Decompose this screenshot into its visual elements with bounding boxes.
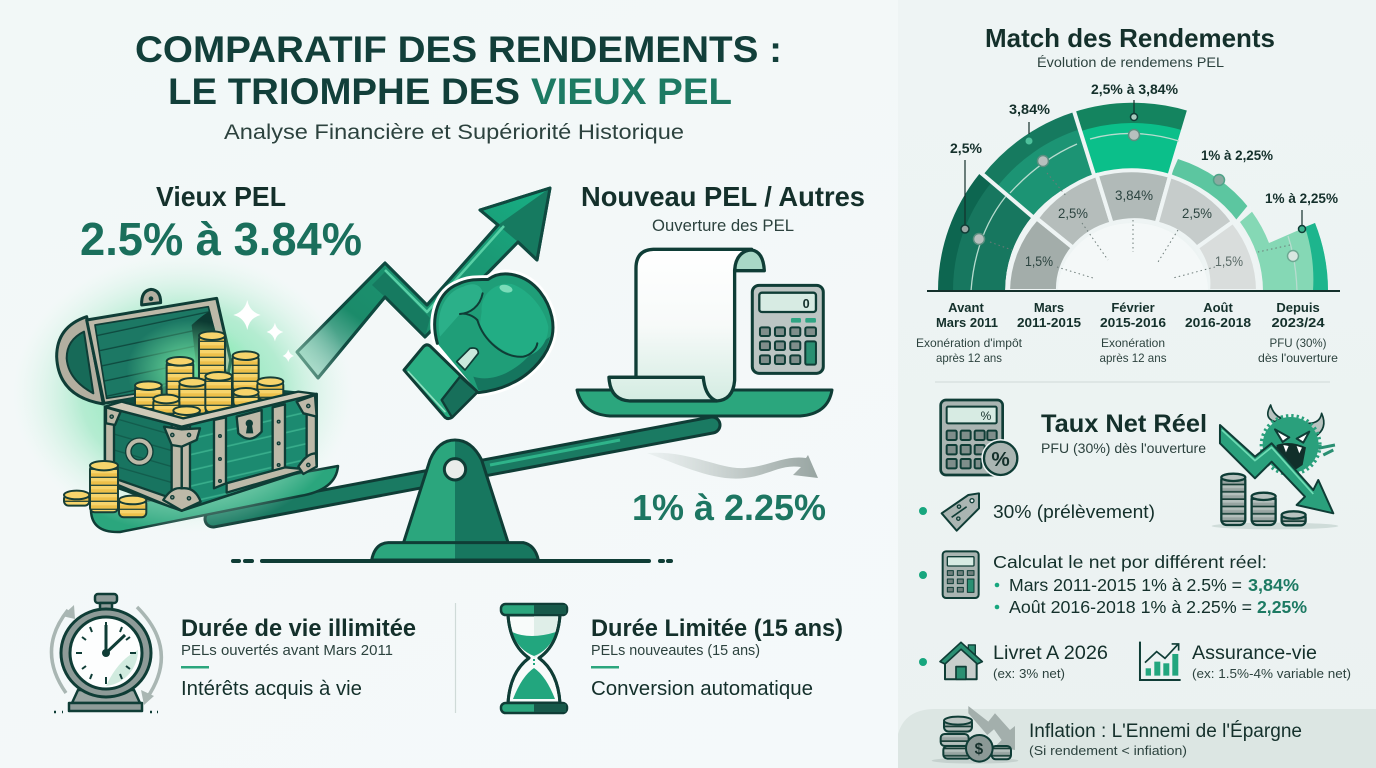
title: COMPARATIF DES RENDEMENTS : — [135, 28, 782, 70]
title — [135, 28, 782, 112]
icon: boxing glove — [404, 274, 553, 419]
bullet item: calcul du net: Calculat le net por différent réel: — [993, 552, 1267, 572]
axis labels — [936, 300, 1325, 330]
axis labels: Août — [1203, 300, 1233, 315]
base line — [262, 559, 649, 563]
sparkles — [233, 300, 294, 362]
icon: calculator with zero: 0 — [803, 297, 810, 311]
icon: price tag — [942, 493, 979, 531]
arrow: rising trend — [297, 188, 550, 378]
text: PFU: PFU (30%) dès l'ouverture — [1041, 440, 1206, 456]
icon: calculator with zero — [752, 285, 823, 373]
axis labels: Mars — [1034, 300, 1064, 315]
axis — [927, 290, 1340, 292]
item: assurance-vie: Assurance-vie — [1192, 643, 1317, 664]
value labels: outer: 1% à 2,25% — [1265, 190, 1339, 206]
bullet item: calcul du net: 3,84% — [1248, 575, 1299, 595]
panel: right column background — [898, 0, 1376, 768]
icon: beam — [213, 425, 712, 519]
lid — [57, 289, 231, 404]
icon: rising bar chart — [1140, 642, 1181, 680]
value labels: inner: 2,5% — [1182, 206, 1212, 221]
icon: hourglass — [501, 604, 567, 713]
value labels: outer: 1% à 2,25% — [1201, 147, 1274, 163]
axis labels: 2015-2016 — [1100, 315, 1166, 330]
icon: calculator — [943, 551, 979, 598]
chest glow — [13, 253, 353, 533]
text block: durée illimitée: Intérêts acquis à vie — [181, 678, 362, 700]
illustration: balance scale — [91, 390, 832, 561]
axis labels: Avant — [948, 300, 984, 315]
bullet item: calcul du net: Août 2016-2018 1% à 2.25% = — [1009, 597, 1252, 617]
outer segments — [938, 103, 1328, 291]
icon: right pan — [577, 390, 832, 416]
markers — [961, 114, 1306, 262]
axis labels: 2023/24 — [1272, 315, 1325, 330]
axis notes — [916, 336, 1338, 365]
panel: inflation band: (Si rendement < infiation) — [1029, 743, 1187, 758]
value labels: inner: 1,5% — [1025, 254, 1053, 269]
heading: nouveau PEL: Nouveau PEL / Autres — [581, 181, 865, 212]
text block: durée limitée: Conversion automatique — [591, 678, 813, 700]
heading: taux net réel: Taux Net Réel — [1041, 410, 1207, 438]
icon: left pan — [91, 466, 338, 532]
icon: document scroll — [609, 249, 764, 401]
value labels: inner: 2,5% — [1058, 206, 1088, 221]
bullet item: prélèvement: 30% (prélèvement) — [993, 502, 1155, 522]
axis labels: Depuis — [1276, 300, 1320, 315]
text: ouverture des PEL: Ouverture des PEL — [652, 216, 794, 235]
value labels: inner: 1,5% — [1215, 254, 1243, 269]
value labels: outer: 2,5% — [950, 140, 983, 156]
axis notes: après 12 ans — [1100, 351, 1166, 365]
icon: fulcrum — [372, 440, 538, 560]
bullet item: livret A: Livret A 2026 — [993, 643, 1108, 664]
icon: stopwatch clock — [51, 594, 161, 712]
inner gray ring — [1008, 170, 1258, 291]
axis labels: 2011-2015 — [1017, 315, 1081, 330]
value labels: outer — [950, 81, 1339, 206]
bullet item: calcul du net: 2,25% — [1257, 597, 1307, 617]
coin stacks outside chest — [64, 461, 146, 517]
icon: calculator percent: % — [981, 409, 992, 423]
item: assurance-vie — [1140, 642, 1351, 681]
title: VIEUX PEL — [531, 70, 732, 112]
chart: semicircular yield timeline — [916, 81, 1340, 365]
text: évolution: Évolution de rendemens PEL — [1037, 54, 1224, 70]
icon: monster with falling arrow and coins — [1212, 405, 1338, 529]
text block: durée limitée — [591, 615, 843, 700]
text block: durée limitée: Durée Limitée (15 ans) — [591, 615, 843, 642]
bullet item: calcul du net: Mars 2011-2015 1% à 2.5% = — [1009, 575, 1242, 595]
value labels: inner: 3,84% — [1115, 188, 1153, 203]
axis labels: 2016-2018 — [1185, 315, 1251, 330]
icon: calculator percent: % — [991, 448, 1010, 471]
axis notes: PFU (30%) — [1270, 336, 1327, 350]
title: LE TRIOMPHE DES — [168, 70, 520, 112]
axis notes: dès l'ouverture — [1258, 351, 1338, 365]
value labels: outer: 3,84% — [1009, 101, 1051, 117]
value: nouveau PEL rate: 1% à 2.25% — [632, 487, 826, 528]
value labels: inner — [1025, 188, 1243, 269]
item: assurance-vie: (ex: 1.5%-4% variable net) — [1192, 667, 1351, 681]
bullet item: calcul du net — [919, 551, 1307, 617]
heading: match des rendements: Match des Rendements — [985, 23, 1275, 53]
axis notes: Exonération — [1101, 336, 1165, 350]
icon: calculator percent — [941, 400, 1019, 477]
arcs and markers — [971, 133, 1297, 291]
icon: treasure chest — [13, 253, 353, 533]
panel: inflation band: Inflation : L'Ennemi de l'Épargne — [1029, 721, 1302, 742]
axis notes: Exonération d'impôt — [916, 336, 1023, 350]
leader lines — [965, 100, 1302, 228]
bullet item: livret A — [919, 642, 1108, 681]
text block: durée illimitée: PELs ouvertés avant Mars 2011 — [181, 643, 393, 659]
heading: vieux PEL: Vieux PEL — [156, 181, 286, 212]
subtitle: Analyse Financière et Supériorité Historique — [224, 120, 684, 144]
text block: durée limitée: PELs nouveautes (15 ans) — [591, 643, 760, 659]
bullet item: livret A: (ex: 3% net) — [993, 667, 1065, 681]
axis labels: Mars 2011 — [936, 315, 998, 330]
panel: inflation band — [898, 706, 1376, 768]
text block: durée illimitée: Durée de vie illimitée — [181, 615, 416, 642]
bullet item: prélèvement — [919, 493, 1155, 531]
icon: house — [940, 642, 982, 679]
chest interior — [105, 380, 317, 425]
dotted leaders — [990, 173, 1290, 278]
icon: coins and falling arrow: $ — [975, 741, 984, 758]
axis notes: après 12 ans — [936, 351, 1002, 365]
coin stacks inside chest — [135, 331, 283, 420]
text block: durée illimitée — [181, 615, 416, 700]
arrow: gray decline — [647, 453, 818, 479]
value: vieux PEL rate: 2.5% à 3.84% — [80, 213, 362, 265]
separators — [980, 107, 1250, 223]
value labels: outer: 2,5% à 3,84% — [1091, 81, 1179, 97]
base dashes — [233, 559, 671, 563]
axis labels: Février — [1111, 300, 1155, 315]
icon: coins and falling arrow — [932, 706, 1018, 764]
chest body — [105, 392, 317, 511]
